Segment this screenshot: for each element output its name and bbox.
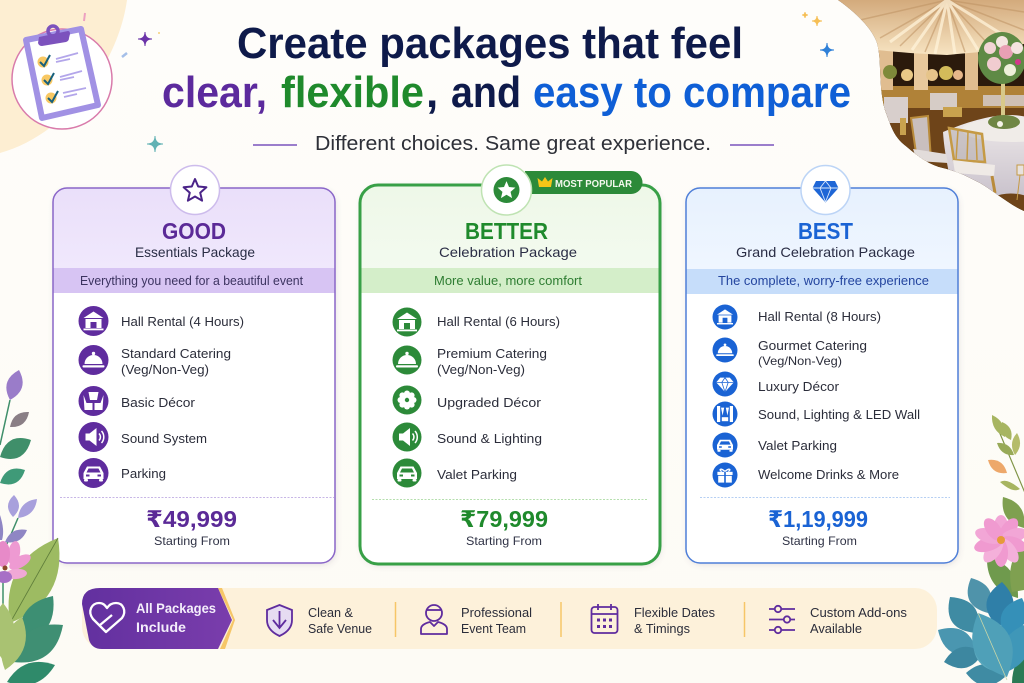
feature list: Premium Catering <box>437 346 547 361</box>
badge: most popular: MOST POPULAR <box>555 178 632 190</box>
package name: Grand Celebration Package <box>736 244 915 260</box>
item: custom add-ons available: Custom Add-ons <box>810 606 907 620</box>
feature list: Valet Parking <box>758 438 837 453</box>
icon: star badge <box>170 166 220 214</box>
title: , <box>426 68 438 117</box>
ribbon label: All Packages <box>136 600 216 616</box>
price: ₹49,999 <box>146 506 237 532</box>
item: clean and safe venue <box>267 605 372 636</box>
icon: star badge <box>482 165 532 215</box>
panel: better package <box>360 165 660 564</box>
title: clear, <box>162 68 267 117</box>
package name: Celebration Package <box>439 244 577 260</box>
item: flexible dates and timings: Flexible Dates <box>634 606 715 620</box>
title: and <box>451 68 521 117</box>
feature list: Basic Décor <box>121 395 196 410</box>
panel: all packages include <box>82 588 937 649</box>
item: custom add-ons available <box>769 606 907 636</box>
feature list: Hall Rental (6 Hours) <box>437 314 560 329</box>
feature list: (Veg/Non-Veg) <box>437 362 525 377</box>
feature list: (Veg/Non-Veg) <box>758 354 842 368</box>
icon: diamond badge <box>801 166 850 214</box>
feature list: Parking <box>121 466 166 481</box>
item: flexible dates and timings <box>592 604 715 636</box>
price caption: Starting From <box>154 534 230 548</box>
feature list: Hall Rental (4 Hours) <box>121 314 244 329</box>
heading: better: BETTER <box>465 218 548 244</box>
panel: good package <box>53 166 335 563</box>
item: flexible dates and timings: & Timings <box>634 622 690 636</box>
title <box>162 19 851 117</box>
price: ₹1,19,999 <box>768 506 868 532</box>
feature list: (Veg/Non-Veg) <box>121 362 209 377</box>
heading: best: BEST <box>798 218 853 244</box>
item: clean and safe venue: Safe Venue <box>308 622 372 636</box>
feature list: Upgraded Décor <box>437 395 542 410</box>
badge: most popular <box>525 171 642 194</box>
panel: best package <box>686 166 958 563</box>
photo: banquet hall <box>830 0 1024 215</box>
feature list <box>712 304 920 488</box>
feature list: Sound & Lighting <box>437 431 542 446</box>
feature list: Sound, Lighting & LED Wall <box>758 407 920 422</box>
feature list: Sound System <box>121 431 207 446</box>
subtitle: Different choices. Same great experience. <box>315 133 711 155</box>
tagline: Everything you need for a beautiful event <box>80 274 304 288</box>
title: flexible <box>281 68 424 117</box>
illustration: right foliage <box>938 415 1024 683</box>
item: professional event team <box>421 605 532 636</box>
feature list <box>392 308 560 488</box>
item: clean and safe venue: Clean & <box>308 606 354 620</box>
feature list <box>78 306 244 488</box>
title: easy to compare <box>533 68 851 117</box>
package name: Essentials Package <box>135 244 255 260</box>
tagline: More value, more comfort <box>434 274 583 288</box>
item: professional event team: Professional <box>461 606 532 620</box>
feature list: Luxury Décor <box>758 379 840 394</box>
feature list: Valet Parking <box>437 467 517 482</box>
decorative peach blob <box>0 0 127 153</box>
price: ₹79,999 <box>460 506 548 532</box>
feature list: Gourmet Catering <box>758 338 867 353</box>
feature list: Standard Catering <box>121 346 231 361</box>
feature list: Welcome Drinks & More <box>758 467 899 482</box>
ribbon label <box>82 588 235 649</box>
price caption: Starting From <box>466 534 542 548</box>
heading: good: GOOD <box>162 218 226 244</box>
illustration: left foliage <box>0 370 63 683</box>
tagline: The complete, worry-free experience <box>718 274 929 288</box>
ribbon label: Include <box>136 619 186 635</box>
feature list: Hall Rental (8 Hours) <box>758 309 881 324</box>
sparkles <box>84 12 834 152</box>
price caption: Starting From <box>782 534 857 548</box>
title: Create packages that feel <box>237 19 743 68</box>
item: professional event team: Event Team <box>461 622 526 636</box>
item: custom add-ons available: Available <box>810 622 862 636</box>
icon: clipboard checklist <box>12 26 112 129</box>
